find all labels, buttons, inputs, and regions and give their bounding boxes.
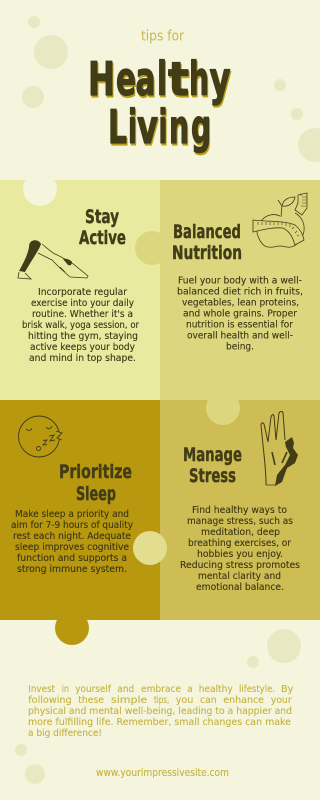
title: Healthy Living: y: [210, 54, 232, 108]
text: closing paragraph: [28, 684, 293, 739]
title: Healthy Living: e: [116, 52, 136, 106]
heading: manage stress: Manage: [183, 444, 242, 466]
text: manage stress body: manage stress, such as: [187, 516, 293, 527]
panel: prioritize sleep: [0, 400, 160, 620]
text: closing paragraph: healthy: [199, 684, 233, 695]
heading: balanced nutrition: Balanced: [173, 221, 241, 243]
text: prioritize sleep body: Make sleep a priority and: [15, 509, 129, 520]
text: manage stress body: hobbies you enjoy.: [197, 549, 283, 560]
text: stay active body: and mind in top shape.: [29, 353, 136, 364]
heading: stay active: [79, 206, 126, 249]
text: closing paragraph: lifestyle.: [239, 684, 275, 695]
text: prioritize sleep body: sleep improves cognitive: [15, 542, 129, 553]
title: Healthy Living: v: [137, 100, 158, 154]
heading: prioritize sleep: Prioritize: [59, 461, 132, 483]
heading: prioritize sleep: [59, 461, 132, 505]
text: closing paragraph: more fulfilling life. Remember, small changes can make: [28, 717, 291, 728]
heading: stay active: Stay: [85, 206, 119, 228]
title: Healthy Living: v: [138, 102, 159, 156]
text: balanced nutrition body: balanced diet rich in fruits,: [177, 286, 303, 298]
text: balanced nutrition body: nutrition is essential for: [186, 320, 294, 330]
text: prioritize sleep body: [11, 509, 133, 575]
text: stay active body: Incorporate regular: [38, 287, 128, 298]
text: closing paragraph: By: [281, 684, 293, 695]
text: balanced nutrition body: [177, 276, 303, 352]
text: balanced nutrition body: being.: [226, 342, 254, 352]
text: closing paragraph: physical and mental well-being, leading to a happier and: [28, 706, 292, 717]
title: Healthy Living: i: [129, 102, 138, 156]
text: closing paragraph: enhance: [223, 695, 264, 706]
text: closing paragraph: yourself: [75, 684, 111, 695]
title: Healthy Living: L: [109, 102, 128, 156]
kicker: tips for: tips for: [141, 28, 184, 44]
text: closing paragraph: and: [117, 684, 134, 695]
title: Healthy Living: t: [168, 52, 189, 106]
text: closing paragraph: your: [271, 695, 293, 706]
heading: manage stress: Stress: [189, 465, 236, 487]
icon: hand: [261, 412, 298, 486]
text: manage stress body: mental clarity and: [198, 571, 281, 582]
text: manage stress body: [180, 505, 300, 593]
title: Healthy Living: h: [190, 54, 210, 108]
text: balanced nutrition body: and whole grains. Proper: [183, 308, 298, 320]
title: Healthy Living: n: [169, 100, 189, 154]
text: balanced nutrition body: vegetables, lean proteins,: [182, 298, 299, 308]
text: closing paragraph: tips,: [154, 695, 169, 706]
text: closing paragraph: embrace: [141, 684, 181, 695]
text: closing paragraph: these: [78, 695, 104, 706]
text: closing paragraph: a big difference!: [28, 728, 102, 739]
title: Healthy Living: i: [128, 100, 137, 154]
text: closing paragraph: following: [28, 695, 72, 706]
text: prioritize sleep body: strong immune system.: [17, 564, 127, 575]
title: Healthy Living: n: [170, 102, 190, 156]
heading: stay active: Active: [79, 227, 126, 249]
text: closing paragraph: simple: [111, 695, 147, 706]
text: closing paragraph: a: [187, 684, 193, 695]
text: balanced nutrition body: Fuel your body with a well-: [178, 276, 302, 286]
icon: apple and tape measure: [253, 193, 307, 247]
icon: sleeping face: [18, 416, 62, 457]
text: manage stress body: breathing exercises, or: [188, 538, 292, 549]
title: Healthy Living: H: [89, 54, 116, 108]
heading: manage stress: [183, 444, 242, 487]
text: manage stress body: meditation, deep: [201, 527, 280, 538]
title: Healthy Living: y: [210, 52, 230, 106]
heading: prioritize sleep: Sleep: [76, 483, 116, 505]
title: Healthy Living: [88, 52, 232, 156]
panel: balanced nutrition: [160, 180, 320, 400]
text: stay active body: exercise into your daily: [31, 298, 134, 309]
text: manage stress body: Reducing stress promotes: [180, 560, 300, 571]
title: Healthy Living: e: [117, 54, 137, 108]
panel: manage stress: [133, 391, 320, 620]
title: Healthy Living: a: [136, 52, 156, 106]
text: closing paragraph: Invest: [28, 684, 55, 695]
text: stay active body: brisk walk, yoga session, or: [22, 320, 140, 331]
title: Healthy Living: l: [157, 52, 167, 106]
title: Healthy Living: H: [88, 52, 115, 106]
text: stay active body: routine. Whether it's a: [32, 309, 133, 320]
title: Healthy Living: g: [192, 102, 212, 156]
title: Healthy Living: h: [189, 52, 209, 106]
text: prioritize sleep body: function and supports a: [17, 553, 127, 564]
title: Healthy Living: l: [158, 54, 168, 108]
icon: yoga pose: [18, 240, 88, 279]
title: Healthy Living: t: [169, 54, 190, 108]
text: prioritize sleep body: rest each night. Adequate: [13, 531, 131, 542]
title: Healthy Living: L: [108, 100, 127, 154]
text: prioritize sleep body: aim for 7-9 hours of quality: [11, 520, 133, 531]
text: stay active body: [22, 287, 140, 364]
text: balanced nutrition body: overall health and well-: [187, 330, 293, 342]
title: Healthy Living: i: [160, 102, 168, 156]
text: stay active body: hitting the gym, staying: [28, 331, 138, 342]
title: Healthy Living: a: [136, 54, 156, 108]
title: Healthy Living: g: [191, 100, 211, 154]
text: closing paragraph: you: [176, 695, 193, 706]
text: manage stress body: Find healthy ways to: [192, 505, 287, 516]
text: closing paragraph: can: [200, 695, 217, 706]
decorative circle: footer: [55, 611, 89, 645]
text: closing paragraph: in: [62, 684, 69, 695]
panel: stay active: [0, 172, 169, 400]
title: Healthy Living: i: [158, 100, 168, 154]
text: website: www.yourimpressivesite.com: [96, 767, 229, 779]
heading: balanced nutrition: [172, 221, 242, 264]
text: stay active body: active keeps your body: [30, 342, 135, 353]
text: manage stress body: emotional balance.: [196, 582, 284, 593]
heading: balanced nutrition: Nutrition: [172, 242, 242, 264]
